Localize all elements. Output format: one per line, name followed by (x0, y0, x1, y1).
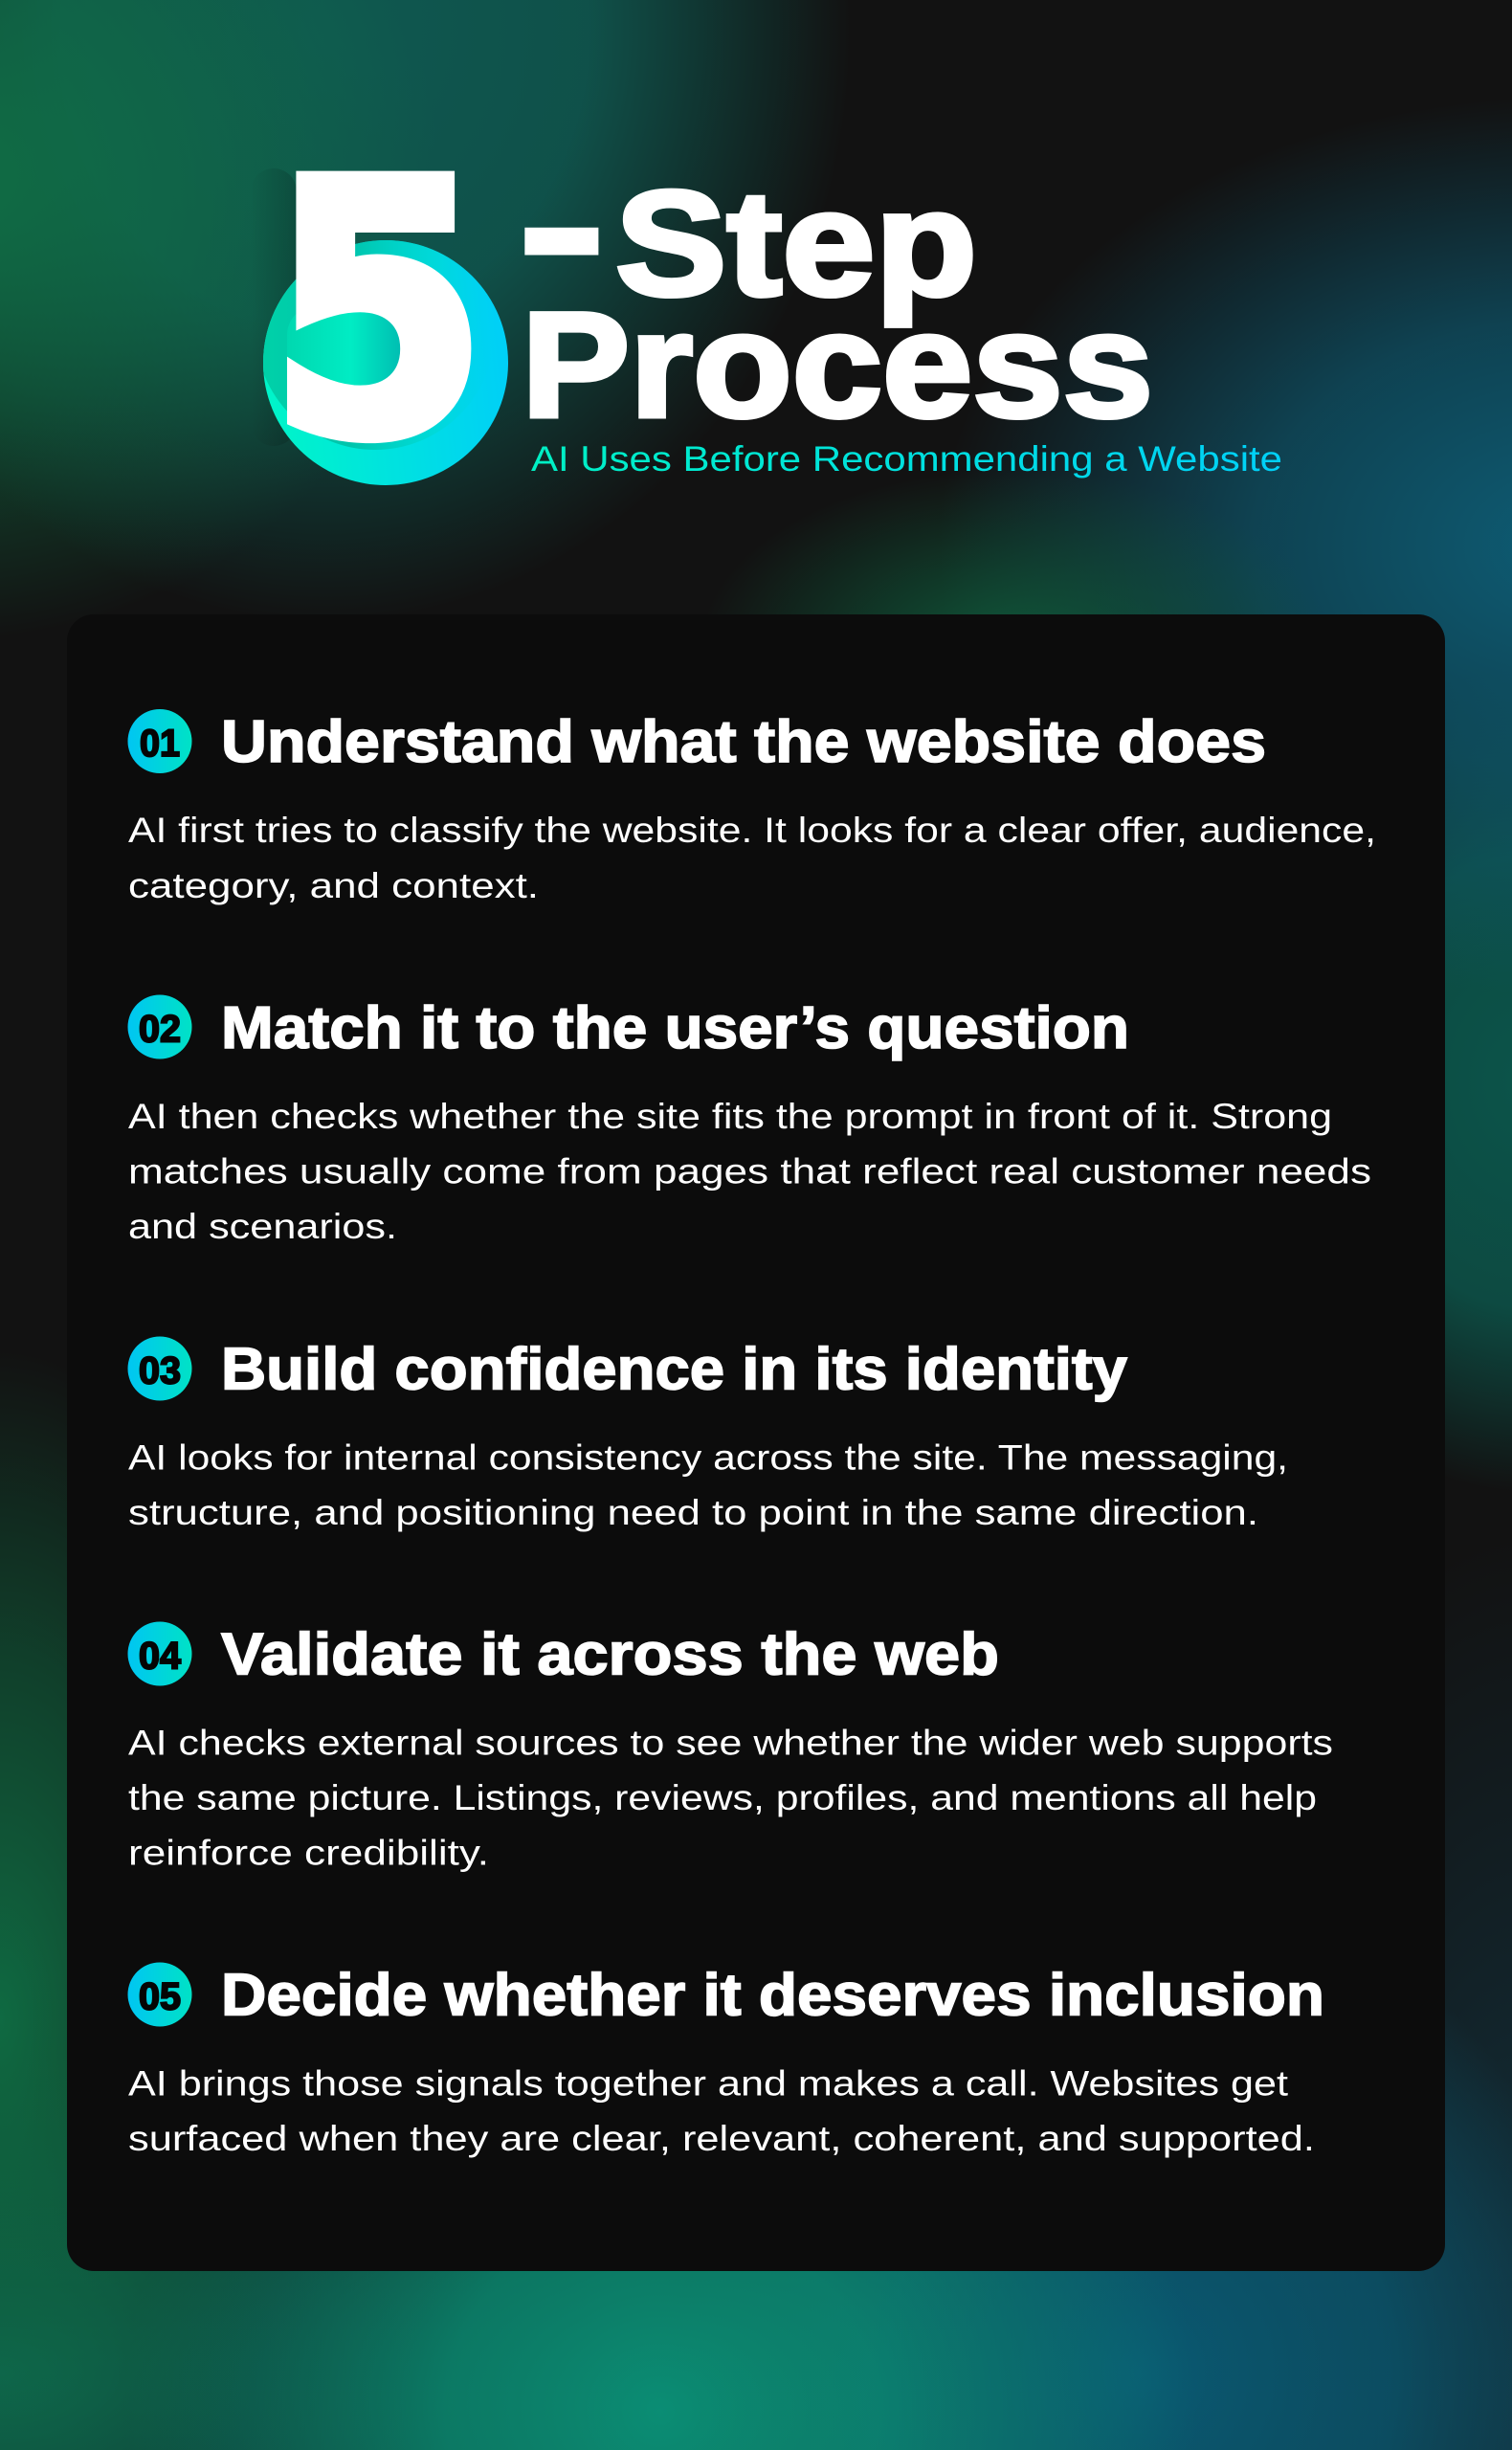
panel: steps card (67, 614, 1445, 2271)
step 2 body: matches usually come from pages that reflect real customer needs (128, 1152, 1371, 1191)
step 3 body: AI looks for internal consistency across the site. The messaging, (128, 1437, 1288, 1478)
icon: big numeral 5 on gradient circle: 5 (269, 109, 487, 514)
step 2 (128, 995, 1371, 1246)
step 2 heading: Match it to the user’s question (221, 995, 1129, 1061)
step 1 heading: Understand what the website does (221, 709, 1266, 775)
step 4 body: reinforce credibility. (128, 1834, 489, 1872)
step 4 (128, 1621, 1333, 1872)
badge 03 (128, 1336, 191, 1401)
step 5 body (128, 2063, 1315, 2158)
step 1 body: AI first tries to classify the website. It looks for a clear offer, audience, (128, 811, 1376, 850)
badge 02: 02 (139, 1009, 181, 1051)
badge 01 (128, 709, 191, 773)
step 3 heading: Build confidence in its identity (221, 1336, 1128, 1403)
step 4 body: the same picture. Listings, reviews, profiles, and mentions all help (128, 1778, 1317, 1817)
badge 04 (128, 1621, 191, 1686)
heading: -Step: Step (615, 161, 977, 327)
heading: -Step: - (518, 119, 606, 332)
step 2 body: AI then checks whether the site fits the prompt in front of it. Strong (128, 1097, 1332, 1136)
step 2 body: and scenarios. (128, 1207, 397, 1246)
step 5 (128, 1962, 1324, 2158)
step 4 heading: Validate it across the web (221, 1621, 999, 1688)
step 4 body: AI checks external sources to see whether the wider web supports (128, 1723, 1333, 1763)
title block (263, 168, 1280, 485)
step 3 (128, 1336, 1288, 1532)
step 5 body: AI brings those signals together and makes a call. Websites get (128, 2063, 1289, 2104)
badge 03: 03 (139, 1349, 181, 1392)
step 2 body (128, 1097, 1371, 1246)
step 5 heading: Decide whether it deserves inclusion (221, 1962, 1324, 2029)
heading: Process: Process (522, 282, 1153, 449)
step 1 (128, 709, 1376, 905)
step 1 body: category, and context. (128, 866, 539, 905)
subtitle: AI Uses Before Recommending a Website (531, 439, 1282, 479)
badge 04: 04 (139, 1635, 182, 1677)
badge 01: 01 (140, 723, 180, 765)
badge 05 (128, 1962, 191, 2027)
step 3 body (128, 1437, 1288, 1532)
step 3 body: structure, and positioning need to point in the same direction. (128, 1493, 1258, 1532)
step 1 body (128, 811, 1376, 905)
badge 02 (128, 995, 191, 1058)
step 5 body: surfaced when they are clear, relevant, coherent, and supported. (128, 2119, 1315, 2158)
badge 05: 05 (139, 1975, 181, 2017)
step 4 body (128, 1723, 1333, 1872)
heading: -Step (518, 119, 977, 332)
